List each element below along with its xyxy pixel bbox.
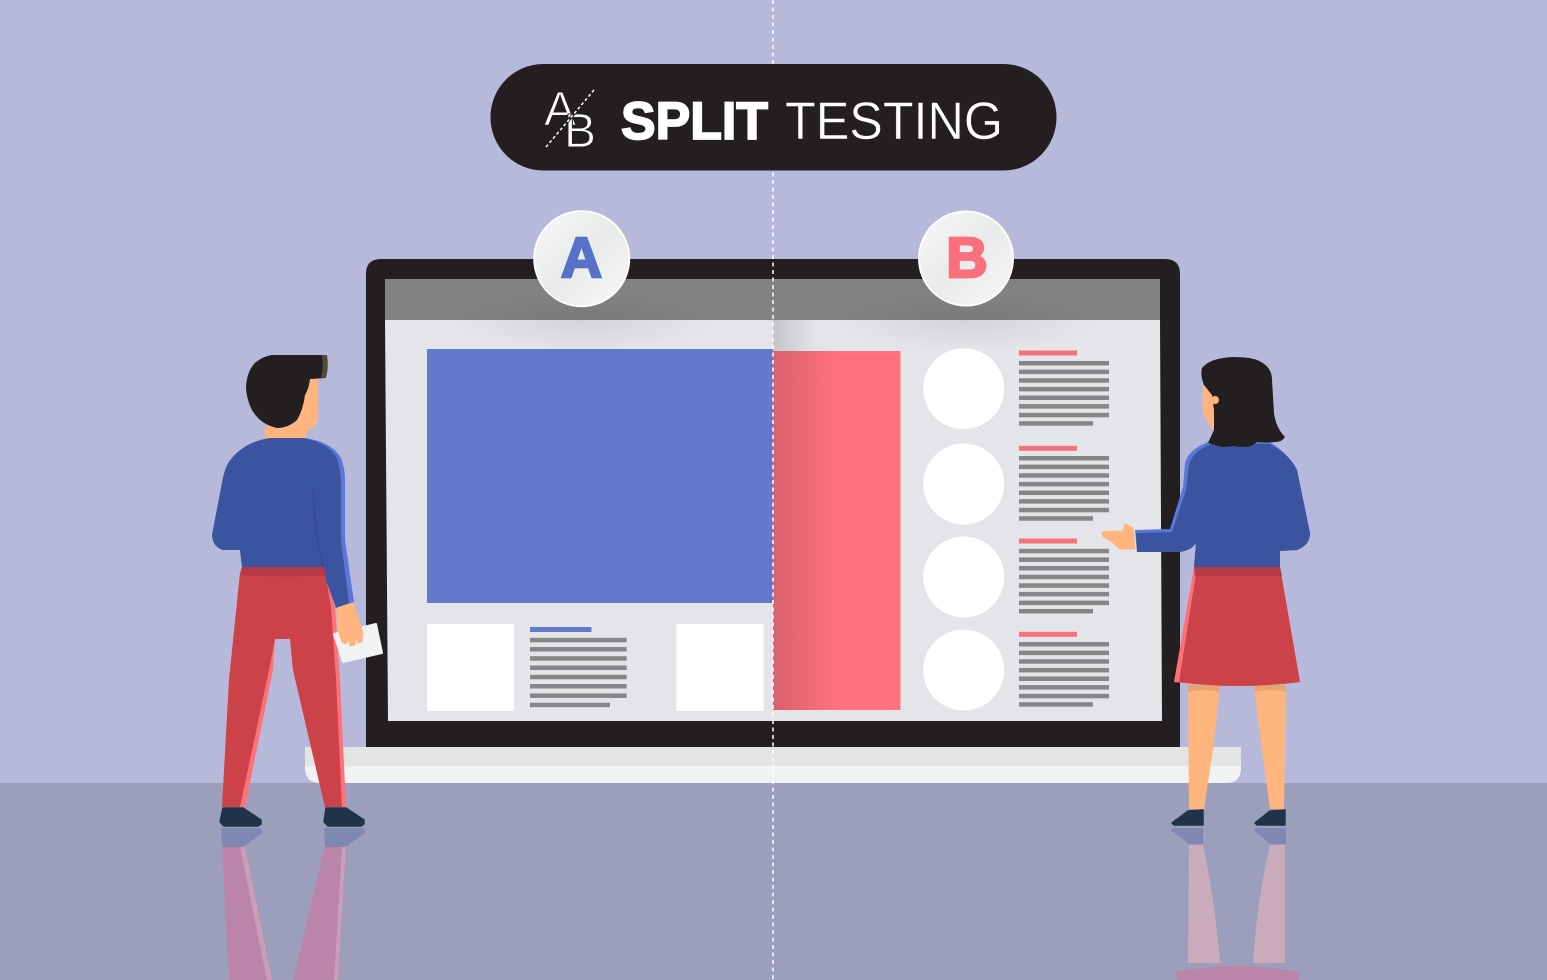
- woman face: [1203, 385, 1218, 430]
- icon: A/B split logo: [544, 83, 596, 158]
- woman figure: [1102, 357, 1310, 825]
- man phone: [334, 624, 382, 662]
- badge A: [533, 210, 630, 307]
- image placeholder left: [427, 624, 514, 711]
- man shoes: [220, 808, 364, 826]
- panel: version B: [773, 348, 1109, 710]
- browser screen: [385, 320, 1162, 721]
- badge B: B: [946, 226, 988, 290]
- man sweater: [212, 438, 354, 608]
- text lines B2: [1019, 446, 1109, 521]
- man neck and face: [265, 375, 318, 439]
- woman reflection: [1171, 828, 1300, 980]
- man hair: [246, 355, 328, 428]
- soft shadows on screen: [452, 292, 1096, 352]
- text lines B1: [1019, 350, 1109, 426]
- circle placeholders: [923, 348, 1004, 710]
- man reflection: [221, 828, 365, 980]
- text lines B4: [1019, 632, 1109, 707]
- woman legs: [1188, 685, 1286, 809]
- pill background: [490, 64, 1056, 170]
- image placeholder right: [676, 624, 764, 711]
- laptop: [305, 259, 1241, 783]
- man figure: [212, 355, 1300, 980]
- man legs: [222, 567, 346, 807]
- badge B: [918, 210, 1014, 306]
- icon: A/B split logo: A: [544, 83, 576, 136]
- woman sweater: [1135, 442, 1310, 567]
- dashed centre divider: [772, 0, 774, 980]
- title pill: [490, 64, 1056, 170]
- woman skirt: [1174, 567, 1300, 686]
- panel: version A: [427, 349, 773, 711]
- badge A: A: [561, 226, 602, 290]
- text lines A: [530, 627, 627, 707]
- woman hair: [1201, 357, 1285, 447]
- man hand: [337, 603, 363, 646]
- hero block B: [773, 351, 900, 710]
- icon: A/B split logo: B: [564, 105, 596, 158]
- title text: split: SPLIT: [621, 92, 768, 151]
- woman pointing hand: [1102, 524, 1135, 549]
- hero block A: [427, 349, 773, 603]
- title text: testing: TESTING: [785, 92, 1003, 151]
- laptop base: [305, 747, 1241, 783]
- wall background: [0, 0, 1547, 783]
- browser title bar: [385, 279, 1160, 320]
- floor: [0, 783, 1547, 980]
- text lines B3: [1019, 538, 1109, 614]
- laptop bezel: [366, 259, 1180, 747]
- woman shoes: [1172, 810, 1285, 825]
